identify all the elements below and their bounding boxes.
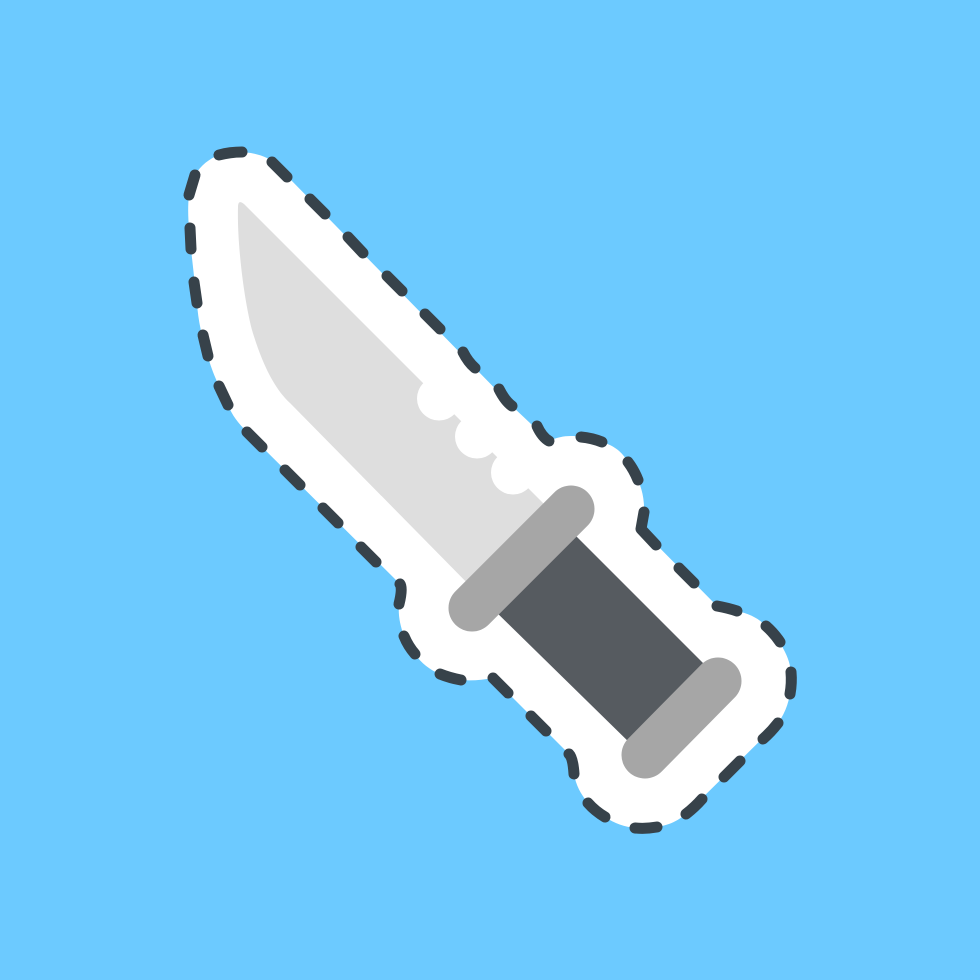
knife handle <box>489 525 713 750</box>
sticker: dashed cut line <box>189 152 791 828</box>
blade serrations <box>417 376 535 494</box>
sticker: white backing <box>188 152 791 828</box>
knife blade <box>238 202 560 596</box>
knife guard <box>472 509 571 608</box>
knife pommel <box>645 681 718 755</box>
